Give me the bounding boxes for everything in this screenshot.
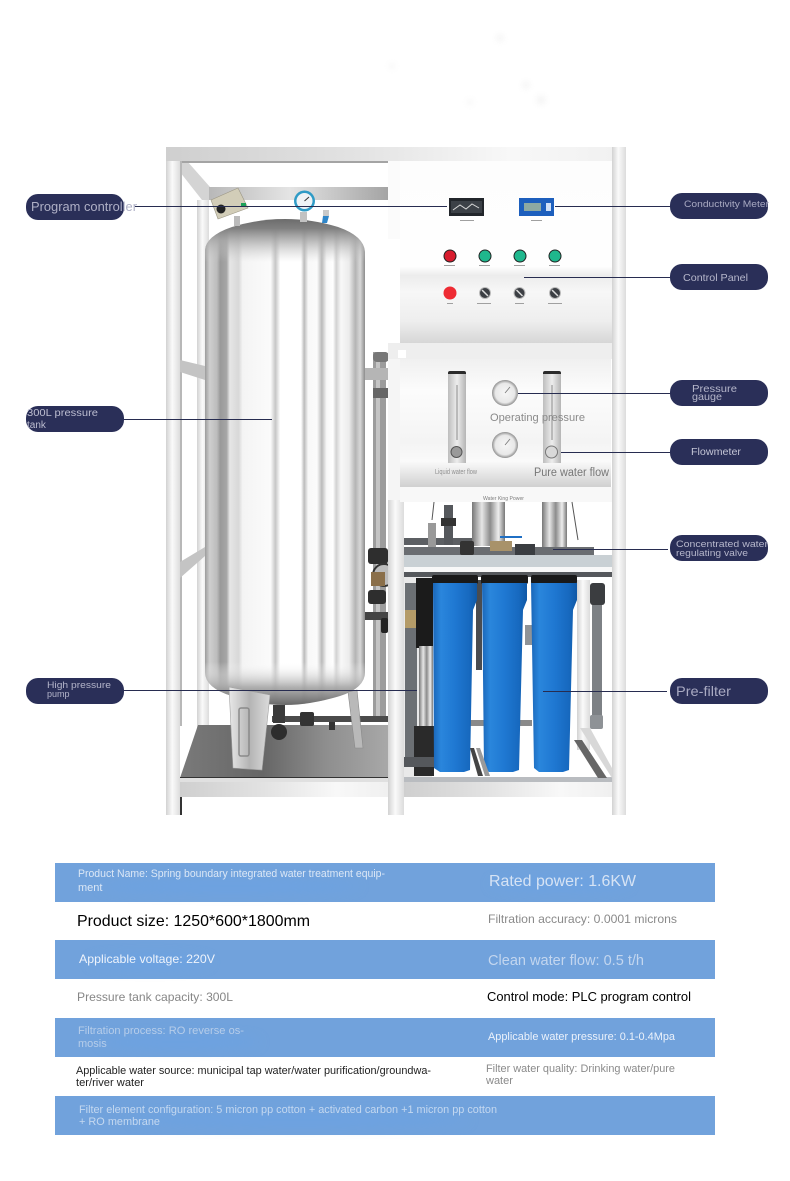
filter element configuration: + RO membrane: [79, 1116, 160, 1128]
filtration process: [78, 1025, 244, 1050]
callout: control panel: Control Panel: [683, 272, 748, 284]
faint background specks: [389, 34, 546, 105]
filtration process: Filtration process: RO reverse os-: [78, 1025, 244, 1037]
callout: high pressure pump: High pressure: [47, 680, 111, 690]
filter water quality: Filter water quality: Drinking water/pure: [486, 1063, 675, 1075]
filter element configuration: [79, 1104, 497, 1128]
filter element configuration: Filter element configuration: 5 micron pp cotton + activated carbon +1 micron pp cotton: [79, 1104, 497, 1116]
indicator lights: [444, 250, 561, 262]
applicable water pressure: Applicable water pressure: 0.1-0.4Mpa: [488, 1031, 676, 1043]
operating pressure gauges: [492, 380, 518, 458]
tank pressure gauge: [294, 190, 315, 222]
frame: rear structure: [180, 160, 590, 750]
flow and pressure panel: [400, 359, 611, 487]
callout: 300L pressure tank: [26, 406, 124, 432]
brand strip: [400, 487, 612, 502]
panel captions: Operating pressure: [490, 412, 585, 424]
filter water quality: [485, 1063, 675, 1087]
panel captions: Liquid water flow: [435, 469, 478, 476]
callout: concentrated water regulating valve: Concentrated water: [676, 539, 768, 550]
callout: concentrated water regulating valve: regulating valve: [676, 548, 748, 559]
callout: conductivity meter: [670, 193, 769, 219]
callout: pressure gauge: [670, 380, 768, 406]
lower filter tray: [404, 728, 612, 782]
acrylic tray and middle shelf: [404, 555, 612, 577]
control panel: [400, 161, 612, 343]
brand strip: Water King Power: [483, 496, 524, 502]
callout: flowmeter: Flowmeter: [691, 446, 742, 458]
safety valve: [322, 210, 329, 223]
callout: flowmeter: [670, 439, 768, 465]
callout: program controller: [26, 194, 138, 220]
product size: Product size: 1250*600*1800mm: [77, 913, 310, 930]
right drain pipe: [590, 583, 605, 729]
filtration accuracy: Filtration accuracy: 0.0001 microns: [488, 912, 677, 926]
callout: pressure gauge: gauge: [692, 391, 722, 403]
high pressure pump: [404, 577, 434, 777]
product name: ment: [78, 882, 102, 894]
gap between panels: [388, 343, 612, 359]
program controller display: [449, 198, 484, 216]
conductivity meter display: [519, 198, 554, 216]
product name: [78, 868, 385, 894]
base plate: [180, 725, 388, 778]
side pipework: [271, 352, 395, 740]
stainless 300L pressure tank: [205, 219, 365, 705]
callout: concentrated water regulating valve: [670, 535, 768, 561]
callout: 300L pressure tank: 300L pressure: [27, 408, 98, 419]
background pipes behind filters: [470, 580, 533, 726]
specification table: [55, 863, 715, 1135]
callout: pressure gauge: Pressure: [692, 383, 737, 395]
pressure switch box: [211, 188, 248, 226]
control mode: Control mode: PLC program control: [487, 990, 691, 1004]
filter water quality: water: [485, 1075, 513, 1087]
tank legs: [229, 687, 363, 770]
callout: high pressure pump: [26, 678, 124, 704]
clean water flow: Clean water flow: 0.5 t/h: [488, 952, 644, 969]
callout: pre-filter: Pre-filter: [676, 683, 731, 699]
applicable water source: Applicable water source: municipal tap water/water purification/groundwa-: [76, 1065, 431, 1077]
callout leader lines: [124, 206, 670, 692]
table row bars: [55, 863, 715, 1135]
frame: front posts and beams: [166, 147, 626, 815]
filtration process: mosis: [78, 1038, 107, 1050]
callout: 300L pressure tank: tank: [27, 420, 47, 431]
rated power: Rated power: 1.6KW: [489, 873, 637, 890]
left flowmeter: [448, 371, 466, 463]
applicable water source: [76, 1065, 431, 1089]
callout: control panel: [670, 264, 768, 290]
panel captions: [435, 412, 610, 479]
water treatment machine: [166, 147, 626, 815]
panel captions: Pure water flow: [534, 467, 610, 479]
applicable water source: ter/river water: [76, 1077, 144, 1089]
right flowmeter: [543, 371, 561, 463]
stop button and selector knobs: [444, 286, 560, 300]
applicable voltage: Applicable voltage: 220V: [79, 952, 215, 966]
product name: Product Name: Spring boundary integrated water treatment equip-: [78, 868, 385, 880]
callout: high pressure pump: pump: [47, 689, 70, 699]
pressure tank capacity: Pressure tank capacity: 300L: [77, 990, 233, 1004]
control panel upper fascia: [388, 161, 612, 239]
callout: pre-filter: [670, 678, 768, 704]
blue pre-filter housings: [432, 575, 577, 772]
callout: conductivity meter: Conductivity Meter: [684, 199, 769, 210]
callout: program controller: Program controller: [31, 199, 138, 214]
membrane housings and upper pipework: [404, 502, 594, 556]
